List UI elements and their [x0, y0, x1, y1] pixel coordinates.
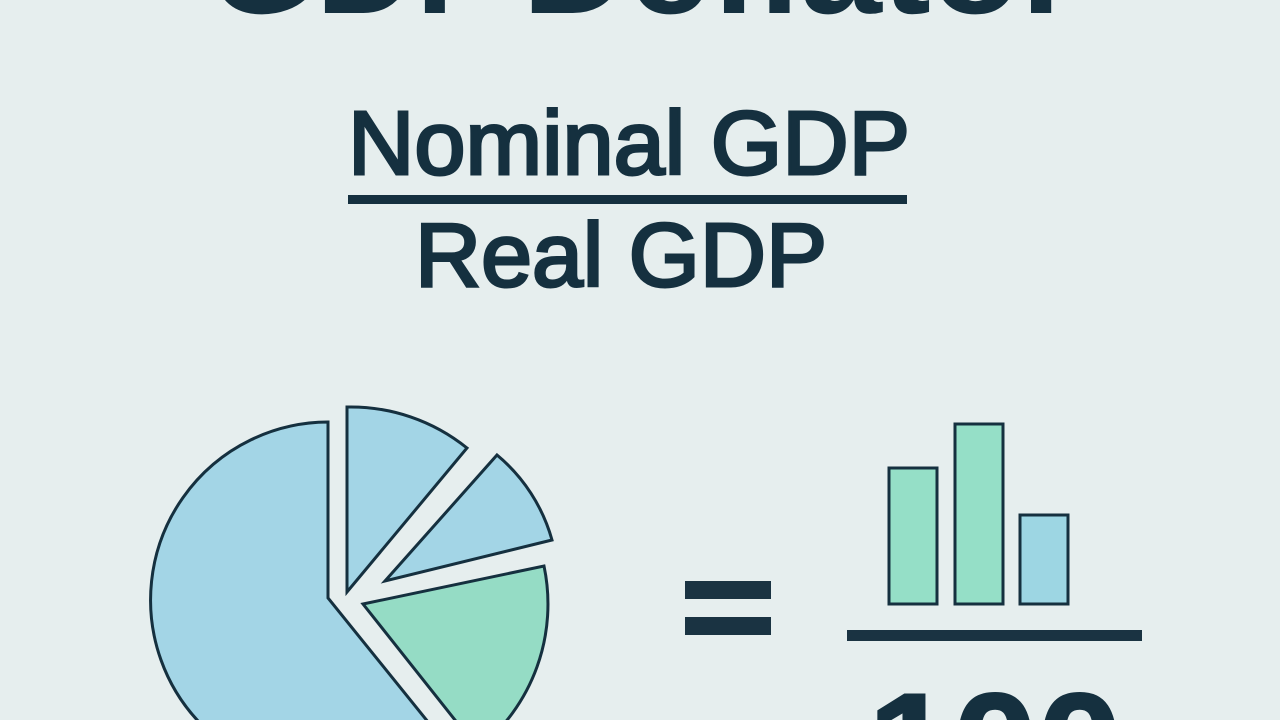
pie chart [151, 407, 552, 720]
bar chart [889, 424, 1068, 604]
denominator: Real GDP: Real GDP [415, 206, 827, 306]
pie slice: large blue [151, 422, 441, 720]
bar: medium green [889, 468, 937, 604]
fraction line under bars [847, 630, 1142, 641]
fraction: nominal over real GDP [348, 94, 910, 306]
numerator: Nominal GDP: Nominal GDP [348, 94, 910, 194]
pie slice: green [363, 566, 548, 720]
bar: tall green [955, 424, 1003, 604]
pie slice: small blue [385, 455, 552, 581]
bar: short blue [1020, 515, 1068, 604]
equals sign [685, 581, 771, 635]
pie slice: top blue [347, 407, 467, 592]
